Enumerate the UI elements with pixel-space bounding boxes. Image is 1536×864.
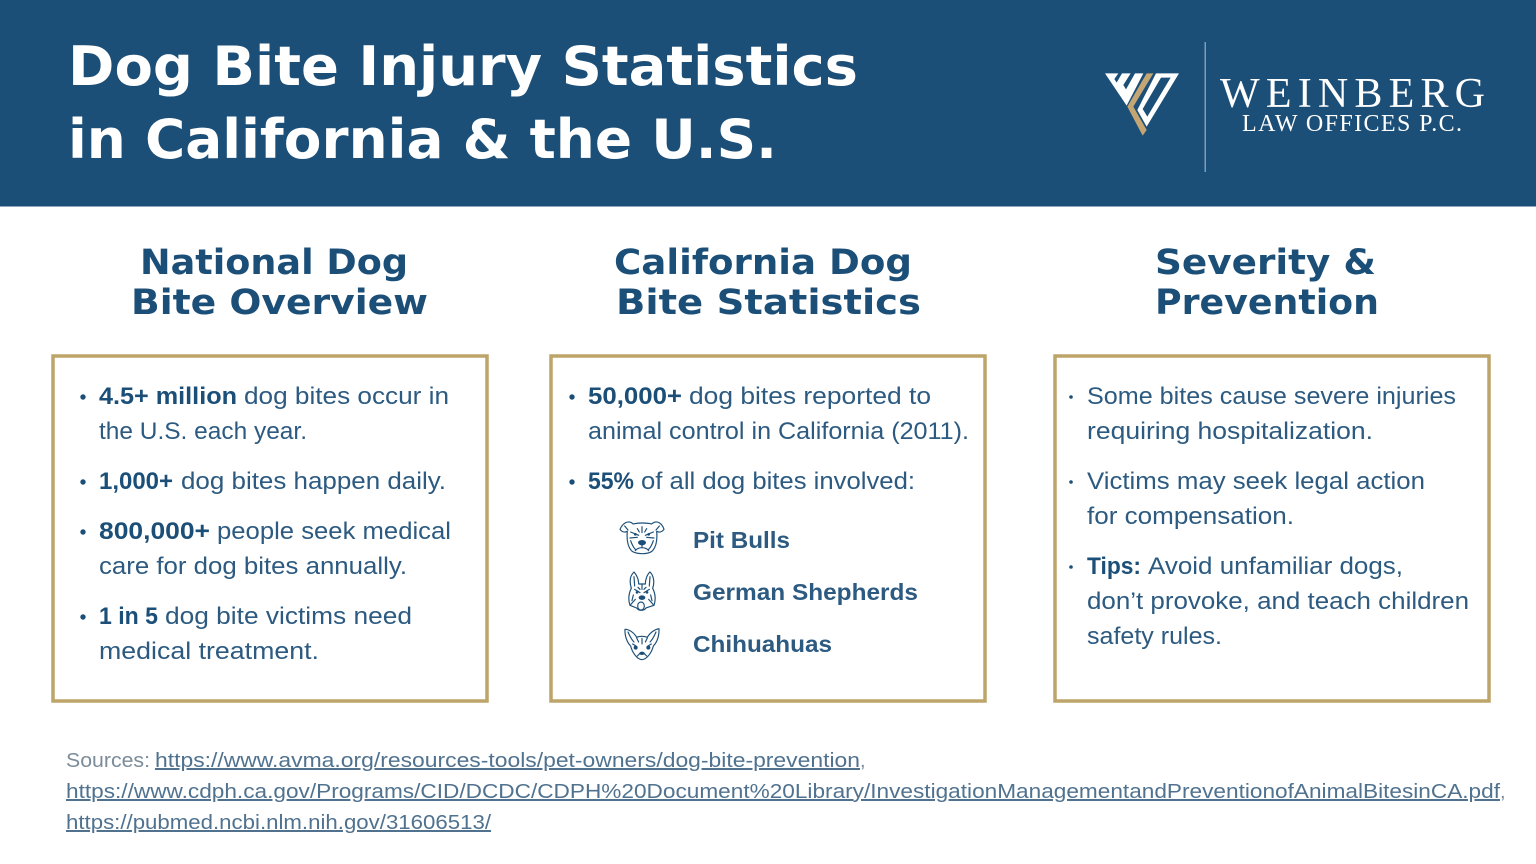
heading: National Dog Bite Overview: Bite Overview bbox=[131, 283, 428, 323]
bullet: tips bbox=[1069, 553, 1469, 650]
heading: Severity & Prevention: Severity & bbox=[1155, 243, 1376, 283]
bullet: tips: don’t provoke, and teach children bbox=[1087, 588, 1469, 615]
sources: , bbox=[860, 750, 866, 772]
bullet: 800,000+: people seek medical bbox=[217, 518, 451, 545]
bullet: 1,000+: 1,000+ bbox=[99, 468, 173, 495]
title: Dog Bite Injury Statistics bbox=[68, 35, 858, 98]
bullet: 1 in 5 bbox=[80, 603, 412, 665]
label: Chihuahuas: Chihuahuas bbox=[693, 631, 832, 657]
bullet: 1 in 5: dog bite victims need bbox=[165, 603, 412, 630]
bullet: 4.5+ million: 4.5+ million bbox=[99, 383, 237, 410]
bullet: tips: safety rules. bbox=[1087, 623, 1222, 650]
heading: California Dog Bite Statistics: California Dog bbox=[614, 243, 912, 283]
title: in California & the U.S. bbox=[68, 108, 777, 171]
label: Pit Bulls: Pit Bulls bbox=[693, 527, 790, 553]
sources: https://www.avma.org/resources-tools/pet-owners/dog-bite-prevention bbox=[155, 750, 860, 772]
title bbox=[68, 35, 858, 171]
divider bbox=[1204, 42, 1206, 172]
logo wordmark: WEINBERG bbox=[1220, 71, 1485, 117]
logo wordmark bbox=[1220, 71, 1485, 137]
bullet: 55%: of all dog bites involved: bbox=[641, 468, 915, 495]
heading: Severity & Prevention: Prevention bbox=[1155, 283, 1379, 323]
bullet: 55%: 55% bbox=[588, 468, 634, 495]
header banner bbox=[0, 0, 1536, 206]
sources bbox=[66, 750, 1506, 834]
bullet: 4.5+ million: dog bites occur in bbox=[244, 383, 449, 410]
bullet: 1 in 5: 1 in 5 bbox=[99, 603, 158, 630]
bullet: 1,000+ bbox=[80, 468, 446, 495]
bullet: legal action: for compensation. bbox=[1087, 503, 1294, 530]
icon: pit bull bbox=[620, 522, 664, 554]
bullet: 800,000+: 800,000+ bbox=[99, 518, 210, 545]
logo wordmark: LAW OFFICES P.C. bbox=[1242, 111, 1462, 137]
bullet: severe injuries: Some bites cause severe injuries bbox=[1087, 383, 1456, 410]
heading: National Dog Bite Overview bbox=[131, 243, 428, 323]
heading: California Dog Bite Statistics bbox=[614, 243, 921, 323]
bullet: severe injuries: requiring hospitalization. bbox=[1087, 418, 1373, 445]
sources: https://www.cdph.ca.gov/Programs/CID/DCDC/CDPH%20Document%20Library/InvestigationManagementandPreventionofAnimalBitesinCA.pdf bbox=[66, 781, 1500, 803]
bullet: 50,000+: dog bites reported to bbox=[689, 383, 931, 410]
bullet: legal action: Victims may seek legal action bbox=[1087, 468, 1425, 495]
heading: Severity & Prevention bbox=[1155, 243, 1379, 323]
bullet: tips: Tips: bbox=[1087, 553, 1141, 580]
icon: German shepherd bbox=[629, 572, 655, 610]
bullet: legal action bbox=[1069, 468, 1425, 530]
sources: , bbox=[1500, 781, 1506, 803]
bullet: 4.5+ million bbox=[80, 383, 449, 445]
bullet: 50,000+: animal control in California (2011). bbox=[588, 418, 969, 445]
label: German Shepherds: German Shepherds bbox=[693, 579, 918, 605]
panel: national overview bbox=[53, 356, 487, 701]
icon: logo mark bbox=[1105, 73, 1179, 136]
bullet: severe injuries bbox=[1069, 383, 1456, 445]
bullet: tips: Avoid unfamiliar dogs, bbox=[1148, 553, 1403, 580]
bullet: 800,000+: care for dog bites annually. bbox=[99, 553, 407, 580]
heading: National Dog Bite Overview: National Dog bbox=[140, 243, 408, 283]
panel: California statistics bbox=[551, 356, 985, 701]
bullet: 4.5+ million: the U.S. each year. bbox=[99, 418, 307, 445]
logo: Weinberg Law Offices bbox=[1105, 42, 1485, 172]
sources: https://pubmed.ncbi.nlm.nih.gov/31606513/ bbox=[66, 812, 491, 834]
panel: severity and prevention bbox=[1055, 356, 1489, 701]
heading: California Dog Bite Statistics: Bite Statistics bbox=[616, 283, 921, 323]
bullet: 1,000+: dog bites happen daily. bbox=[181, 468, 446, 495]
icon: chihuahua bbox=[625, 629, 659, 660]
bullet: 800,000+ bbox=[80, 518, 451, 580]
bullet: 1 in 5: medical treatment. bbox=[99, 638, 319, 665]
bullet: 50,000+ bbox=[569, 383, 969, 445]
bullet: 50,000+: 50,000+ bbox=[588, 383, 682, 410]
sources: Sources: bbox=[66, 750, 150, 772]
